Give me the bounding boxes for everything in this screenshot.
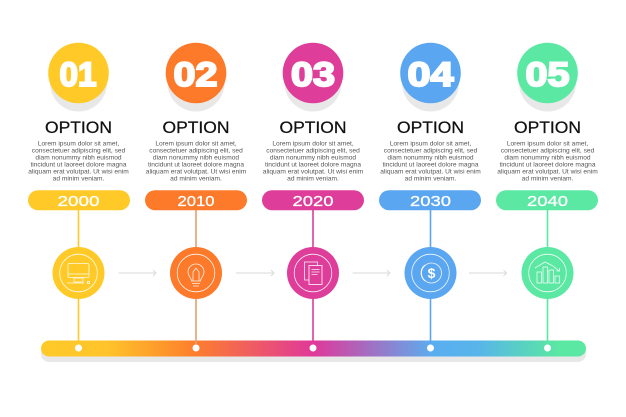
description: aliquam erat volutpat. Ut wisi enim — [28, 169, 129, 176]
description: diam nonummy nibh euismod — [504, 155, 591, 162]
description: Lorem ipsum dolor sit amet, — [390, 141, 471, 148]
description: consectetuer adipiscing elit, sed — [384, 148, 478, 155]
connector line — [78, 205, 80, 348]
description: consectetuer adipiscing elit, sed — [266, 148, 360, 155]
description: ad minim veniam. — [170, 176, 222, 183]
year pill — [496, 190, 598, 210]
connector line — [195, 205, 197, 348]
arrow — [236, 270, 274, 276]
description: tincidunt ut laoreet dolore magna — [382, 162, 479, 169]
description: ad minim veniam. — [405, 176, 457, 183]
icon: light bulb — [170, 247, 222, 299]
column 1: 2000 — [28, 43, 130, 351]
description: aliquam erat volutpat. Ut wisi enim — [263, 169, 364, 176]
icon: bar chart — [522, 247, 574, 299]
number badge 03 — [283, 43, 343, 112]
arrow — [118, 270, 156, 276]
arrow — [352, 270, 390, 276]
year pill: 2030 — [410, 193, 451, 210]
icon: computer — [52, 247, 104, 299]
number badge 02 — [166, 43, 226, 112]
year pill: 2040 — [527, 193, 568, 210]
description: tincidunt ut laoreet dolore magna — [265, 162, 361, 169]
timeline dot — [310, 344, 316, 352]
description: diam nonummy nibh euismod — [270, 155, 356, 162]
timeline dot — [427, 344, 434, 352]
year pill — [379, 190, 481, 210]
description: consectetuer adipiscing elit, sed — [32, 148, 126, 155]
description: tincidunt ut laoreet dolore magna — [499, 162, 596, 169]
description: diam nonummy nibh euismod — [387, 155, 474, 162]
timeline bar — [41, 340, 586, 362]
icon: documents — [287, 247, 339, 299]
column 3: 2020 — [262, 43, 364, 351]
description: diam nonummy nibh euismod — [153, 155, 239, 162]
description: Lorem ipsum dolor sit amet, — [272, 141, 354, 148]
description: Lorem ipsum dolor sit amet, — [155, 141, 237, 148]
description: aliquam erat volutpat. Ut wisi enim — [380, 169, 481, 176]
year pill — [145, 190, 247, 210]
connector line — [546, 205, 548, 348]
number badge 05 — [517, 43, 578, 112]
description: consectetuer adipiscing elit, sed — [149, 148, 243, 155]
year pill — [262, 190, 364, 210]
number badge 01 — [48, 43, 109, 112]
number badge 05: 05 — [526, 56, 570, 94]
description: consectetuer adipiscing elit, sed — [501, 148, 595, 155]
heading: OPTION — [45, 118, 112, 137]
description: tincidunt ut laoreet dolore magna — [148, 162, 244, 169]
number badge 02: 02 — [174, 56, 218, 94]
year pill: 2010 — [178, 193, 214, 210]
column 5: 2040 — [496, 43, 598, 351]
heading: OPTION — [162, 118, 230, 137]
description: Lorem ipsum dolor sit amet, — [38, 141, 119, 148]
year pill: 2020 — [292, 193, 334, 210]
icon: dollar coin: $ — [428, 265, 436, 281]
description: ad minim veniam. — [53, 176, 105, 183]
description: aliquam erat volutpat. Ut wisi enim — [497, 169, 598, 176]
timeline dot — [192, 344, 200, 352]
year pill: 2000 — [58, 193, 100, 210]
icon: dollar coin — [404, 247, 456, 299]
year pill — [28, 190, 130, 210]
description: ad minim veniam. — [522, 176, 574, 183]
timeline dot — [544, 344, 551, 352]
number badge 03: 03 — [291, 56, 335, 94]
column 2: 2010 — [145, 43, 247, 351]
arrow — [469, 270, 506, 276]
description: ad minim veniam. — [287, 176, 339, 183]
heading: OPTION — [280, 118, 346, 137]
number badge 01: 01 — [60, 56, 96, 94]
heading: OPTION — [397, 118, 464, 137]
heading: OPTION — [514, 118, 581, 137]
description: tincidunt ut laoreet dolore magna — [30, 162, 127, 169]
timeline dot — [75, 344, 82, 352]
connector line — [430, 205, 432, 348]
description: diam nonummy nibh euismod — [35, 155, 122, 162]
description: aliquam erat volutpat. Ut wisi enim — [146, 169, 247, 176]
number badge 04 — [400, 43, 461, 112]
description: Lorem ipsum dolor sit amet, — [507, 141, 588, 148]
column 4: 2030 — [379, 43, 481, 351]
connector line — [312, 205, 314, 348]
number badge 04: 04 — [408, 56, 454, 94]
